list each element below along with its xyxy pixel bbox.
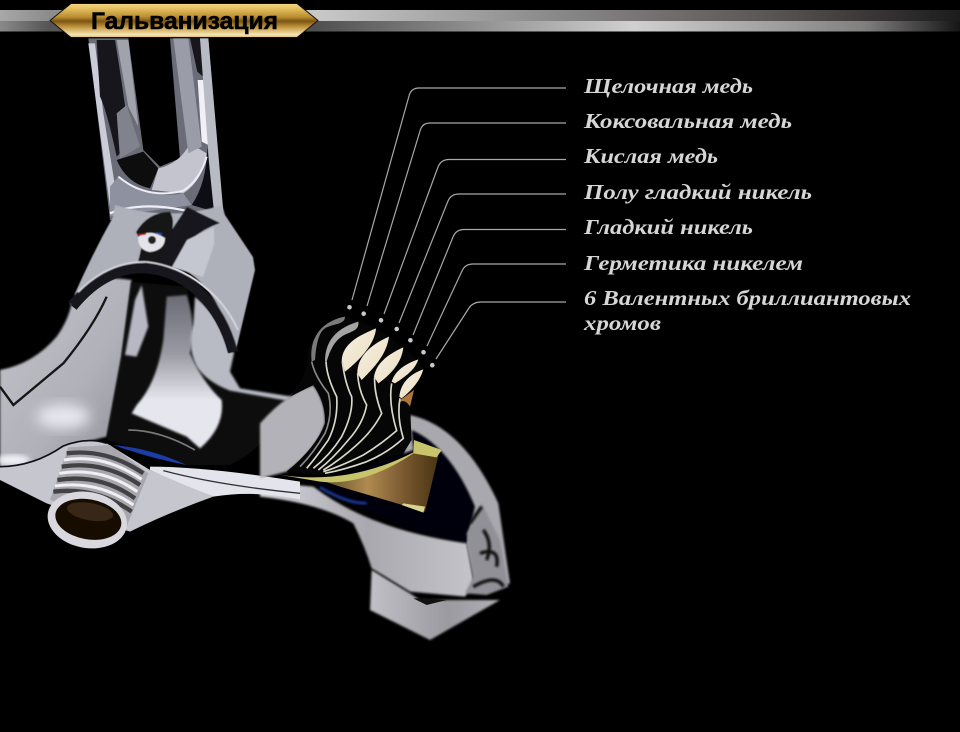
label: bright nickel (408, 215, 753, 343)
plated leaves (311, 317, 423, 407)
threaded nipple (43, 445, 148, 555)
faucet illustration (0, 38, 510, 640)
label: alkaline copper (347, 74, 753, 310)
spout top arc (260, 415, 510, 640)
exposed wedge (275, 440, 442, 513)
lever ring (73, 268, 233, 352)
layer ribs (300, 362, 403, 473)
header bar (0, 10, 960, 32)
lever collar (70, 205, 255, 352)
right lobe (191, 297, 292, 401)
label: semi-bright nickel (394, 180, 812, 331)
black section (287, 317, 423, 475)
label: bright nickel: Гладкий никель (583, 215, 753, 239)
grey shoulder (260, 385, 325, 478)
label: coke copper: Коксовальная медь (583, 109, 792, 133)
title badge (50, 4, 318, 38)
label: hexavalent chrome: хромов (583, 311, 662, 335)
label: hexavalent chrome: 6 Валентных бриллиантовых (584, 286, 911, 310)
label: nickel seal (421, 251, 803, 355)
label: nickel seal: Герметика никелем (583, 251, 803, 275)
upper handle (88, 38, 223, 220)
label: acid copper (379, 144, 718, 323)
cutaway plating layers (260, 317, 442, 513)
label: hexavalent chrome (430, 286, 911, 368)
label: coke copper (361, 109, 792, 316)
label: alkaline copper: Щелочная медь (583, 74, 753, 98)
lower arm and flange (0, 441, 300, 532)
centre pillar (107, 282, 290, 465)
label: semi-bright nickel: Полу гладкий никель (583, 180, 812, 204)
title: Гальванизация (91, 8, 278, 35)
faucet body and arms (0, 262, 300, 555)
label: acid copper: Кислая медь (583, 144, 718, 168)
left arm (0, 277, 132, 468)
